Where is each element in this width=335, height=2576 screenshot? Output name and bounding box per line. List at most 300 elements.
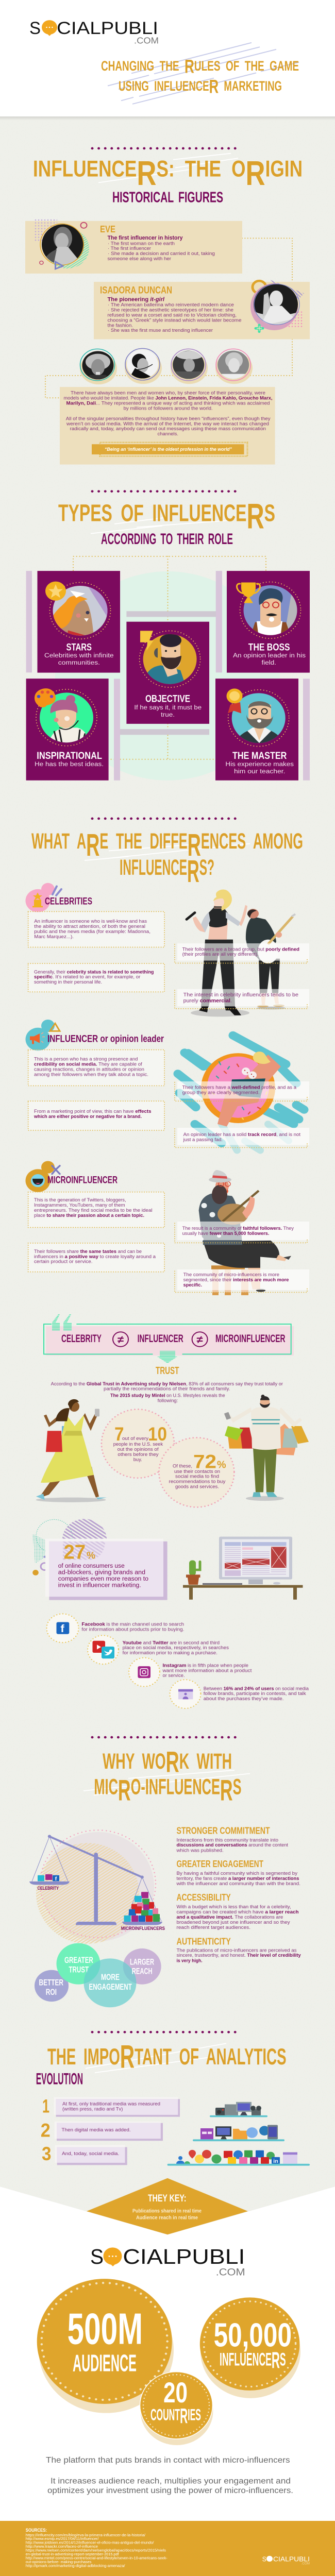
celebrities block bbox=[26, 883, 309, 1009]
avatar: the boss bbox=[240, 582, 301, 638]
ad-blocker text: companies even more reason to bbox=[58, 1575, 148, 1582]
icon: celebrity trophy blob bbox=[26, 883, 61, 912]
text box: celebrity status: something in their personal life. bbox=[34, 979, 102, 985]
text box: faithful followers bbox=[175, 1222, 309, 1243]
footer logo: CIALPUBLI bbox=[273, 2555, 310, 2563]
section heading: differences among influencers: S? bbox=[199, 855, 214, 880]
Isadora text bbox=[107, 297, 241, 333]
avatar: inspirational bbox=[36, 689, 97, 746]
closing logo: .COM bbox=[216, 2267, 245, 2278]
section heading: why work with micro-influencers: R bbox=[220, 1774, 233, 1807]
intro paragraph: All of the singular personalities throughout history have been “influencers”, even though they bbox=[66, 416, 271, 421]
icon: megaphone blob bbox=[26, 1020, 60, 1050]
closing logo bbox=[90, 2245, 245, 2278]
icon: palette bbox=[35, 688, 56, 707]
panel: Eve bbox=[25, 218, 242, 274]
stat: 20 countries: IES bbox=[188, 2405, 201, 2424]
trust text bbox=[51, 1381, 283, 1403]
keyboard and mouse bbox=[203, 1582, 280, 1585]
stat: 72 percent: goods and services. bbox=[175, 1484, 219, 1489]
text box: community segmented: The community of micro-influencers is more bbox=[183, 1272, 279, 1277]
stat: 72 percent: 72 bbox=[193, 1451, 216, 1472]
step 3: And, today, social media. bbox=[62, 2151, 119, 2156]
stat: 72 percent: % bbox=[217, 1459, 226, 1470]
text box: celebrity definition bbox=[28, 911, 164, 947]
left pan with icons bbox=[29, 1874, 70, 1885]
benefit: stronger commitment: STRONGER COMMITMENT bbox=[176, 1826, 270, 1837]
Eve text: · The first woman on the earth bbox=[108, 241, 175, 246]
text box: celebrity definition: An influencer is someone who is well-know and has bbox=[34, 919, 147, 924]
item: Instagram: want more information about a product bbox=[162, 1668, 252, 1673]
intro paragraph: weren’t on social media. With the arrival of the Internet, the way we interact has changed bbox=[66, 421, 269, 426]
stat: 20 countries: R bbox=[180, 2405, 188, 2428]
text box: influencer definition: among their followers when they talk about a topic. bbox=[34, 1072, 148, 1077]
step 2 bbox=[41, 2120, 163, 2141]
text box: micro definition: place to share their passion about a certain topic. bbox=[34, 1213, 144, 1218]
larger reach label: REACH bbox=[132, 1966, 153, 1976]
illustration: woman on donut bbox=[178, 1036, 304, 1150]
Isadora text: · The American ballerina who reinvented modern dance bbox=[108, 302, 234, 307]
influencer block bbox=[26, 1020, 309, 1147]
section heading: why work with micro-influencers: S bbox=[233, 1775, 241, 1799]
text box: celebrity followers: Their followers are a broad group, but poorly defined bbox=[182, 947, 299, 952]
stat: 7 out of every 10: 7 bbox=[114, 1423, 124, 1445]
benefit: stronger commitment: which was published. bbox=[176, 1848, 224, 1853]
heading: celebrities: CELEBRITIES bbox=[45, 896, 92, 907]
step 3 bbox=[42, 2143, 127, 2165]
portrait: Dali bbox=[125, 348, 162, 384]
Stars label: STARS bbox=[66, 642, 92, 653]
section heading: influencers the origin: S: THE O bbox=[156, 156, 246, 181]
text box: celebrity definition: public and the news media (for example: Madonna, bbox=[34, 929, 150, 934]
intro paragraph: There have always been men and women who, by sheer force of their personality, were bbox=[71, 391, 265, 396]
sources: SOURCES: bbox=[26, 2528, 47, 2533]
benefit: accessibility: reach different target audiences. bbox=[176, 1925, 250, 1930]
text box: marketing effects: From a marketing point of view, this can have effects bbox=[34, 1109, 152, 1114]
stat: 72 percent: social media to find bbox=[175, 1474, 219, 1479]
Master label: THE MASTER bbox=[232, 751, 287, 761]
item: Facebook: for information about products prior to buying. bbox=[81, 1627, 184, 1632]
Master label: him our teacher. bbox=[234, 768, 285, 775]
Inspirational label bbox=[35, 751, 104, 768]
step 1: At first, only traditional media was measured bbox=[62, 2102, 160, 2107]
text box: track record: An opinion leader has a solid track record, and is not bbox=[183, 1132, 300, 1137]
benefit: greater engagement bbox=[176, 1859, 300, 1886]
section heading: why work with micro-influencers: O-INFLUENCE bbox=[131, 1775, 220, 1799]
section heading: influencers the origin: INFLUENCE bbox=[33, 156, 175, 181]
ad-blocker text: invest in influencer marketing. bbox=[58, 1582, 141, 1588]
section heading: differences among influencers bbox=[31, 819, 303, 889]
section heading: differences among influencers: R bbox=[86, 827, 99, 862]
text box: marketing effects: which are either positive or negative for a brand. bbox=[34, 1114, 142, 1119]
item: YouTube and Twitter: for information prior to making a purchase. bbox=[123, 1650, 217, 1655]
section heading: why work with micro-influencers: R bbox=[166, 1745, 179, 1778]
text box: micro definition bbox=[28, 1192, 164, 1227]
intro paragraph: by millions of followers around the world. bbox=[124, 406, 213, 411]
sources bbox=[26, 2528, 167, 2568]
icons: digital media shelf bbox=[193, 2125, 284, 2141]
benefit: accessibility: and a qualitative impact. The collaborations are bbox=[176, 1914, 283, 1920]
Isadora text: The pioneering it-girl bbox=[107, 297, 165, 302]
card: The Boss bbox=[227, 571, 310, 673]
Boss label: THE BOSS bbox=[248, 642, 290, 653]
bubble: more engagement bbox=[83, 1958, 136, 2007]
section heading: influencers the origin: R bbox=[246, 154, 265, 193]
trust text: following: bbox=[158, 1398, 178, 1403]
text box: influencer followers: group they are clearly segmented. bbox=[182, 1090, 260, 1095]
text box: celebrity status: Generally, their celebrity status is related to something bbox=[34, 970, 154, 974]
Boss label: An opinion leader in his bbox=[233, 652, 306, 659]
text box: micro definition: Instagrammers, YouTubers, many of them bbox=[34, 1202, 125, 1208]
section heading: importance of analytics: EVOLUTION bbox=[36, 2070, 83, 2088]
section heading: types of influencers: S bbox=[264, 500, 275, 527]
stat: 72 percent bbox=[159, 1437, 234, 1507]
subtitle: USING INFLUENCE bbox=[119, 78, 260, 94]
bubble: larger reach bbox=[123, 1948, 161, 1985]
stat: 72 percent: Of these, bbox=[173, 1464, 192, 1469]
text box: celebrity interest bbox=[175, 989, 309, 1009]
benefits list bbox=[176, 1826, 301, 1963]
stat: 7 out of every 10 bbox=[102, 1409, 174, 1478]
item: YouTube and Twitter: place on social media, respectively, in searches bbox=[123, 1646, 229, 1650]
benefit: authenticity: The publications of micro-influencers are perceived as bbox=[176, 1948, 297, 1953]
text box: influencer followers: Their followers have a well-defined profile, and as a bbox=[182, 1085, 297, 1090]
benefit: greater engagement: with the influencer and community than with the brand. bbox=[176, 1881, 300, 1886]
stat: 7 out of every 10: out the opinions of bbox=[118, 1447, 159, 1452]
step 2: 2 bbox=[41, 2120, 51, 2141]
portrait: Einstein bbox=[80, 349, 117, 384]
Objective label: OBJECTIVE bbox=[145, 693, 190, 704]
stat: 20 countries bbox=[140, 2372, 213, 2445]
closing logo: S bbox=[90, 2245, 104, 2269]
four historical portraits bbox=[80, 348, 253, 384]
icon: medal bbox=[227, 689, 242, 713]
stat: 72 percent: use their contacts on bbox=[174, 1469, 220, 1474]
Stars label: communities. bbox=[58, 659, 100, 666]
section heading: importance of analytics: THE IMPO bbox=[47, 2044, 173, 2070]
singer bbox=[187, 889, 247, 1015]
text box: celebrity status: specific. It’s related to an event, for example, or bbox=[34, 975, 140, 979]
item: brand followers: follow brands, participate in contests, and talk bbox=[204, 1691, 306, 1696]
section heading: types of influencers: R bbox=[246, 497, 264, 536]
cactus bbox=[186, 1560, 200, 1585]
stat circles bbox=[102, 1409, 234, 1507]
stat: 20 countries: COUNT bbox=[150, 2405, 213, 2424]
intro paragraph: channels. bbox=[157, 431, 178, 436]
heading: microinfluencer: MICROINFLUENCER bbox=[47, 1175, 118, 1185]
section heading: influencers the origin: IGIN bbox=[265, 156, 303, 181]
trust text: The 2015 study by Mintel on U.S. lifestyles reveals the bbox=[110, 1393, 225, 1398]
icon: smiley blob bbox=[26, 1161, 60, 1192]
diamond: the key bbox=[87, 2178, 248, 2234]
stat: 50,000 influencers: INFLUENCE bbox=[220, 2349, 331, 2369]
icon: not equal: ≠ bbox=[118, 1334, 124, 1346]
stat: 500M audience bbox=[37, 2279, 174, 2413]
card: The Master bbox=[215, 679, 298, 781]
benefit: accessibility: campaigns can be created which have a larger reach bbox=[176, 1909, 299, 1914]
illustration: woman shopping bbox=[36, 1399, 107, 1502]
text box: influencer definition bbox=[28, 1050, 164, 1086]
table bbox=[183, 1585, 303, 1600]
benefit: stronger commitment bbox=[176, 1826, 288, 1853]
portrait: Frida Kahlo bbox=[171, 349, 208, 384]
monitor bbox=[219, 1537, 292, 1584]
label: influencer: INFLUENCER bbox=[138, 1332, 183, 1345]
sources: https://www.nielsen.com/content/dam/nielsenglobal/apac/docs/reports/2015/niels bbox=[26, 2549, 166, 2552]
overlapping benefit bubbles bbox=[35, 1943, 161, 2007]
label: celebrity: CELEBRITY bbox=[61, 1332, 102, 1345]
icons: social media shelf bbox=[167, 2150, 310, 2166]
benefit: accessibility: broadened beyond just one influencer and so they bbox=[176, 1920, 290, 1925]
text box: celebrity status bbox=[28, 963, 164, 992]
Stars label bbox=[44, 642, 114, 666]
benefit: greater engagement: GREATER ENGAGEMENT bbox=[176, 1859, 263, 1870]
section heading: differences among influencers: R bbox=[187, 853, 199, 889]
left pan with icons: f bbox=[55, 1876, 57, 1882]
text box: influencer definition: causing reactions, changes in attitudes or opinion bbox=[34, 1067, 144, 1072]
sources: http://www.traackr.com/faces-of-influence bbox=[26, 2545, 98, 2549]
diamond: the key: THEY KEY: bbox=[148, 2193, 186, 2204]
text box: influencer followers bbox=[175, 1081, 309, 1101]
header logo bbox=[29, 18, 159, 45]
Isadora heading: ISADORA DUNCAN bbox=[100, 285, 172, 296]
sources: en-global-trust-in-advertising-report-september-2015.pdf bbox=[26, 2552, 119, 2556]
section heading: influencers the origin: R bbox=[137, 154, 156, 193]
text box: micro definition: This is the generation of Twitters, bloggers, bbox=[34, 1198, 126, 1202]
intro paragraph: Marilyn, Dali... They represented a unique way of acting and thinking which was acclaimed bbox=[66, 401, 270, 405]
label: microinfluencer: MICROINFLUENCER bbox=[215, 1332, 286, 1345]
header logo: CIALPUBLI bbox=[57, 18, 158, 38]
stat: 7 out of every 10: out of every bbox=[122, 1436, 148, 1441]
stat: 50,000 influencers bbox=[200, 2297, 300, 2398]
stat: 7 out of every 10: others before they bbox=[118, 1452, 159, 1457]
stool feet bbox=[212, 1292, 248, 1295]
illustration: man shopping bbox=[224, 1395, 309, 1501]
types panel background bbox=[26, 556, 310, 781]
bubble: greater trust: GREATER bbox=[64, 1955, 93, 1965]
social media list bbox=[46, 1614, 309, 1708]
Isadora text: the fashion. bbox=[107, 323, 133, 328]
Isadora portrait bbox=[250, 279, 304, 332]
section heading: differences among influencers: R bbox=[188, 827, 201, 862]
stat: 7 out of every 10: 10 bbox=[148, 1423, 167, 1445]
sources: https://influencity.com/es/blog/eva-la-primera-influencer-de-la-historia/ bbox=[26, 2533, 145, 2537]
text box: celebrity interest: purely commercial. bbox=[183, 998, 232, 1004]
benefit: stronger commitment: discussions and conversations around the content bbox=[176, 1842, 288, 1848]
decorative shapes bbox=[32, 1519, 107, 1575]
text box: community segmented: segmented, since their interests are much more bbox=[183, 1277, 289, 1282]
stat: 50,000 influencers: 50,000 bbox=[214, 2317, 292, 2354]
item: Instagram: Instagram is in fifth place when people bbox=[163, 1663, 248, 1668]
header logo: S bbox=[29, 18, 41, 38]
text box: community segmented: specific. bbox=[183, 1282, 202, 1287]
text box: faithful followers: usually have fewer than 5,000 followers. bbox=[182, 1231, 269, 1236]
icon: not equal bbox=[192, 1332, 208, 1347]
icon: lightning bolt bbox=[140, 631, 154, 651]
stat: 500M audience: 500M bbox=[68, 2304, 143, 2353]
larger reach label bbox=[130, 1957, 154, 1976]
platform description: optimizes your investment using the power of micro-influencers. bbox=[47, 2486, 293, 2495]
label: microinfluencers: MICROINFLUENCERS bbox=[121, 1926, 165, 1931]
item: Facebook: Facebook is the main channel used to search bbox=[81, 1622, 184, 1627]
icon: not equal bbox=[113, 1332, 128, 1347]
scale stand bbox=[48, 1835, 144, 1925]
panel: Isadora Duncan bbox=[94, 279, 310, 339]
footer logo: .COM bbox=[301, 2562, 310, 2566]
benefit: accessibility: With a budget which is less than that for a celebrity, bbox=[176, 1904, 291, 1909]
card: Stars bbox=[37, 571, 120, 673]
sources: http://www.esmip.es/2017/04/11/influencer/ bbox=[26, 2537, 99, 2541]
platform description: The platform that puts brands in contact with micro-influencers bbox=[46, 2455, 290, 2465]
platform description: It increases audience reach, multiplies your engagement and bbox=[51, 2477, 291, 2485]
section heading: differences among influencers: INFLUENCE bbox=[120, 855, 255, 880]
item: Instagram bbox=[129, 1658, 252, 1686]
connector dotted line bbox=[45, 238, 292, 398]
stat: 7 out of every 10: people in the U.S. seek bbox=[113, 1442, 163, 1447]
sources: http://www.jotdown.es/2014/12/influencer-el-oficio-mas-antiguo-del-mundo/ bbox=[26, 2541, 154, 2545]
stat: 72 percent: recommendations to buy bbox=[169, 1479, 226, 1484]
subtitle bbox=[101, 56, 299, 97]
stat: 500M audience: AUDIENCE bbox=[73, 2350, 137, 2377]
Objective label bbox=[134, 693, 202, 718]
text box: micro definition: entrepreneurs. They find social media to be the ideal bbox=[34, 1208, 153, 1213]
avatar: star celebrity bbox=[49, 582, 110, 639]
header logo: .COM bbox=[134, 35, 159, 45]
benefit: greater engagement: By having a faithful community which is segmented by bbox=[176, 1871, 297, 1876]
step 1 bbox=[42, 2096, 180, 2117]
panel: intro text bbox=[60, 387, 275, 465]
section heading: types of influencers bbox=[58, 492, 275, 548]
section heading: why work with micro-influencers: K WITH bbox=[179, 1750, 232, 1774]
Boss label: field. bbox=[262, 659, 276, 666]
Eve text bbox=[107, 235, 215, 261]
text box: faithful followers: The result is a community of faithful followers. They bbox=[182, 1226, 294, 1231]
step 1: (written press, radio and Tv) bbox=[62, 2107, 123, 2112]
text box: celebrity interest: The interest in celebrity influencers tends to be bbox=[183, 992, 298, 998]
benefit: accessibility bbox=[176, 1893, 299, 1930]
section heading: importance of analytics: R bbox=[120, 2039, 135, 2075]
bubble: more engagement: ENGAGEMENT bbox=[89, 1981, 132, 1992]
illustration: desk with ad-filled monitor bbox=[183, 1537, 303, 1600]
panel: ad-blockers stat bbox=[32, 1519, 167, 1600]
stat: 50,000 influencers: R bbox=[272, 2347, 280, 2373]
section heading: why work with micro-influencers: WHY WO bbox=[103, 1750, 211, 1774]
bubble: better ROI: ROI bbox=[46, 1987, 57, 1997]
stat: 7 out of every 10: buy. bbox=[133, 1457, 142, 1462]
section heading: importance of analytics bbox=[36, 2032, 287, 2088]
bubble: greater trust: TRUST bbox=[69, 1964, 89, 1974]
trust text: partially the recommendations of their friends and family. bbox=[104, 1386, 230, 1391]
avatar: the master bbox=[228, 690, 289, 747]
step 2: Then digital media was added. bbox=[61, 2128, 131, 2132]
diamond: the key: Publications shared in real time bbox=[132, 2209, 202, 2214]
Objective label: If he says it, it must be bbox=[134, 704, 202, 711]
subtitle: ULES bbox=[194, 58, 220, 74]
ad-blocker text: of online consumers use bbox=[58, 1562, 125, 1569]
evolution steps bbox=[41, 2096, 180, 2165]
illustration: singer and guitarist bbox=[187, 889, 295, 1016]
Eve text: · The first influencer bbox=[108, 246, 151, 251]
item: brand followers: about the purchases they’ve made. bbox=[204, 1696, 284, 1701]
item: YouTube and Twitter: Youtube and Twitter are in second and third bbox=[123, 1640, 220, 1645]
text box: celebrity followers: (their profiles are all very different). bbox=[182, 952, 259, 957]
step 1: 1 bbox=[42, 2096, 49, 2117]
guitarist bbox=[246, 909, 295, 1007]
sources: http://ipmark.com/marketing-digital-adblocking-amenaza/ bbox=[26, 2564, 125, 2568]
footer logo bbox=[262, 2555, 310, 2566]
Master label bbox=[225, 751, 294, 775]
Eve heading: EVE bbox=[100, 225, 115, 235]
text box: influencer definition: credibility on social media. They are capable of bbox=[34, 1062, 142, 1066]
benefit: authenticity: AUTHENTICITY bbox=[176, 1937, 231, 1947]
section heading: influencers the origin bbox=[33, 148, 303, 206]
decorative diagonal lines behind subtitle bbox=[108, 43, 299, 104]
illustration: balance scale bbox=[29, 1830, 165, 1944]
benefit: authenticity: is very high. bbox=[176, 1958, 203, 1963]
item: Instagram: or service. bbox=[163, 1673, 185, 1678]
icons: traditional media shelf bbox=[210, 2102, 267, 2117]
benefit: stronger commitment: Interactions from this community translate into bbox=[176, 1838, 278, 1842]
subtitle: MARKETING bbox=[219, 78, 282, 94]
quote bar bbox=[92, 443, 247, 456]
Isadora text: choosing a “Greek” style instead which would later become bbox=[107, 318, 241, 323]
Master label: His experience makes bbox=[225, 760, 294, 768]
trust text: According to the Global Trust in Advertising study by Nielsen, 83% of all consumers say they trust totally or bbox=[51, 1381, 283, 1386]
Eve text: someone else along with her bbox=[107, 257, 171, 261]
card: Objective bbox=[126, 622, 209, 724]
bubble: better ROI bbox=[35, 1970, 69, 2002]
footer bbox=[0, 2521, 335, 2576]
sources: out-opinions-before- making-purchases bbox=[26, 2560, 92, 2564]
Eve text: · She made a decision and carried it out, taking bbox=[108, 251, 215, 256]
text box: track record bbox=[175, 1128, 309, 1147]
benefit: authenticity: sincere, trustworthy, and honest. Their level of credibility bbox=[176, 1953, 301, 1958]
Stars label: Celebrities with infinite bbox=[44, 652, 114, 659]
benefit: accessibility: ACCESSIBILITY bbox=[176, 1893, 231, 1903]
quote bar: “Being an ‘influencer’ is the oldest profession in the world” bbox=[105, 447, 232, 452]
section heading: influencers the origin: HISTORICAL FIGURES bbox=[112, 189, 223, 206]
Eve text: The first influencer in history bbox=[107, 235, 183, 241]
section heading: differences among influencers: WHAT A bbox=[31, 829, 131, 853]
Inspirational label: INSPIRATIONAL bbox=[37, 751, 102, 761]
text box: track record: just a passing fad. bbox=[183, 1137, 223, 1142]
item: brand followers bbox=[170, 1680, 309, 1708]
stat: 27 percent: 27 bbox=[64, 1540, 86, 1563]
intro paragraph bbox=[64, 391, 272, 436]
Isadora text: · She rejected the aesthetic stereotypes of her time: she bbox=[108, 308, 233, 312]
Isadora text: · She was the first muse and trending influencer bbox=[108, 328, 213, 333]
microinfluencer block bbox=[26, 1161, 309, 1292]
illustration: banjo player bbox=[199, 1170, 291, 1294]
section heading: differences among influencers: E THE DIFFE bbox=[99, 829, 188, 853]
bubble: greater trust bbox=[57, 1943, 100, 1985]
text box: celebrity definition: the ability to attract attention, of both the general bbox=[34, 924, 145, 929]
Inspirational label: He has the best ideas. bbox=[35, 760, 104, 768]
text box: influencer definition: This is a person who has a strong presence and bbox=[34, 1057, 138, 1062]
bubble: better ROI: BETTER bbox=[39, 1977, 63, 1987]
ad-blocker text: ad-blockers, giving brands and bbox=[58, 1569, 145, 1575]
item: Facebook bbox=[46, 1614, 184, 1642]
stat: 27 percent: % bbox=[87, 1550, 95, 1561]
closing logo: CIALPUBLI bbox=[123, 2245, 245, 2269]
comparison banner bbox=[44, 1314, 294, 1355]
trust heading: TRUST bbox=[156, 1365, 179, 1377]
text box: marketing effects bbox=[28, 1101, 164, 1130]
icon: trophy bbox=[237, 582, 260, 603]
Boss label bbox=[233, 642, 306, 666]
bubble: more engagement: MORE bbox=[101, 1972, 120, 1982]
avatar: objective bbox=[140, 631, 200, 687]
